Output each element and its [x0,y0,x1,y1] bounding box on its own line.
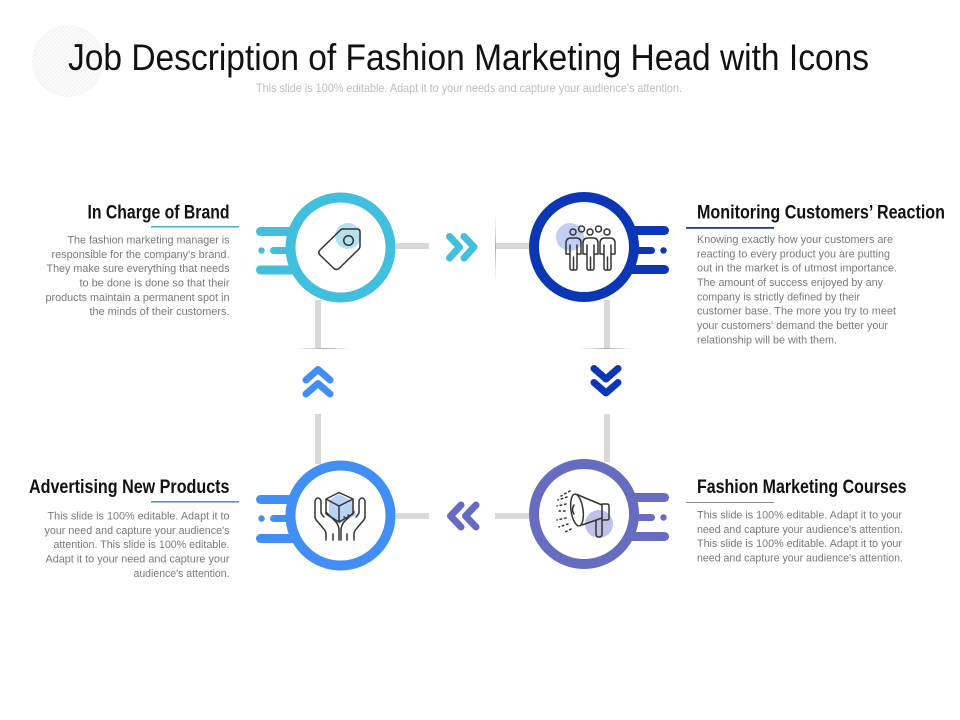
body text: Adapt it to your need and capture your [46,554,230,566]
node: brand (tag) [256,198,390,298]
speed lines [625,493,669,541]
icon: megaphone [556,491,613,538]
body text [44,510,230,580]
arrow: double chevron down [594,368,618,393]
subtitle: This slide is 100% editable. Adapt it to your needs and capture your audience's attention. [256,81,682,95]
title: Job Description of Fashion Marketing Head with Icons [68,37,869,78]
body text: the minds of their customers. [90,306,230,318]
body text: relationship will be with them. [697,334,837,346]
underline [686,227,774,229]
body text: out in the market is of utmost importance. [697,262,897,274]
ring [290,466,390,566]
body text: need and capture your audience's attention. [697,552,903,564]
underline [151,501,239,503]
underline [151,226,239,228]
body text: The fashion marketing manager is [68,234,230,246]
body text: This slide is 100% editable. Adapt it to your [697,538,902,550]
body text [697,234,897,346]
heading: Advertising New Products [29,477,230,498]
body text: reacting to every product you are putting [697,248,890,260]
body text: This slide is 100% editable. Adapt it to your [697,510,902,522]
body text: attention. This slide is 100% editable. [54,539,230,551]
icon: price tag [319,223,361,270]
ring [290,198,390,298]
body text: Knowing exactly how your customers are [697,234,893,246]
arrow: double chevron left [450,505,476,527]
body text: responsible for the company's brand. [52,249,230,261]
decorative hatched circle behind title [32,25,104,97]
body text: company is strictly defined by their [697,291,860,303]
body text: products maintain a permanent spot in [46,292,230,304]
icon: hands holding box [315,492,365,540]
text block: advertising new products [29,477,239,580]
body text: audience's attention. [134,568,230,580]
arrow: double chevron up [306,370,330,394]
heading: Fashion Marketing Courses [697,477,906,498]
body text: need and capture your audience's attention. [697,524,903,536]
body text: your need and capture your audience's [44,525,230,537]
speed lines [256,495,300,543]
body text [697,510,903,564]
body text: to be done is done so that their [80,278,230,290]
connector lines [295,216,634,519]
heading: In Charge of Brand [88,202,230,224]
text block: monitoring customers reaction [686,202,945,346]
text block: in charge of brand [46,202,239,318]
underline [686,502,774,503]
node: customers (people) [534,197,669,297]
speed lines [256,227,300,274]
body text [46,234,230,318]
ring [534,197,634,297]
body text: your customers' demand the better your [697,320,888,332]
text block: fashion marketing courses [686,477,906,564]
body text: The amount of success enjoyed by any [697,277,883,289]
icon: three people [556,223,615,270]
arrow: double chevron right [450,236,474,258]
ring [534,464,634,564]
node: advertising (hands and box) [256,466,390,566]
body text: customer base. The more you try to meet [697,306,897,318]
body text: This slide is 100% editable. Adapt it to [48,510,230,522]
body text: They make sure everything that needs [46,263,230,275]
node: courses (megaphone) [534,464,669,564]
speed lines [625,226,669,274]
